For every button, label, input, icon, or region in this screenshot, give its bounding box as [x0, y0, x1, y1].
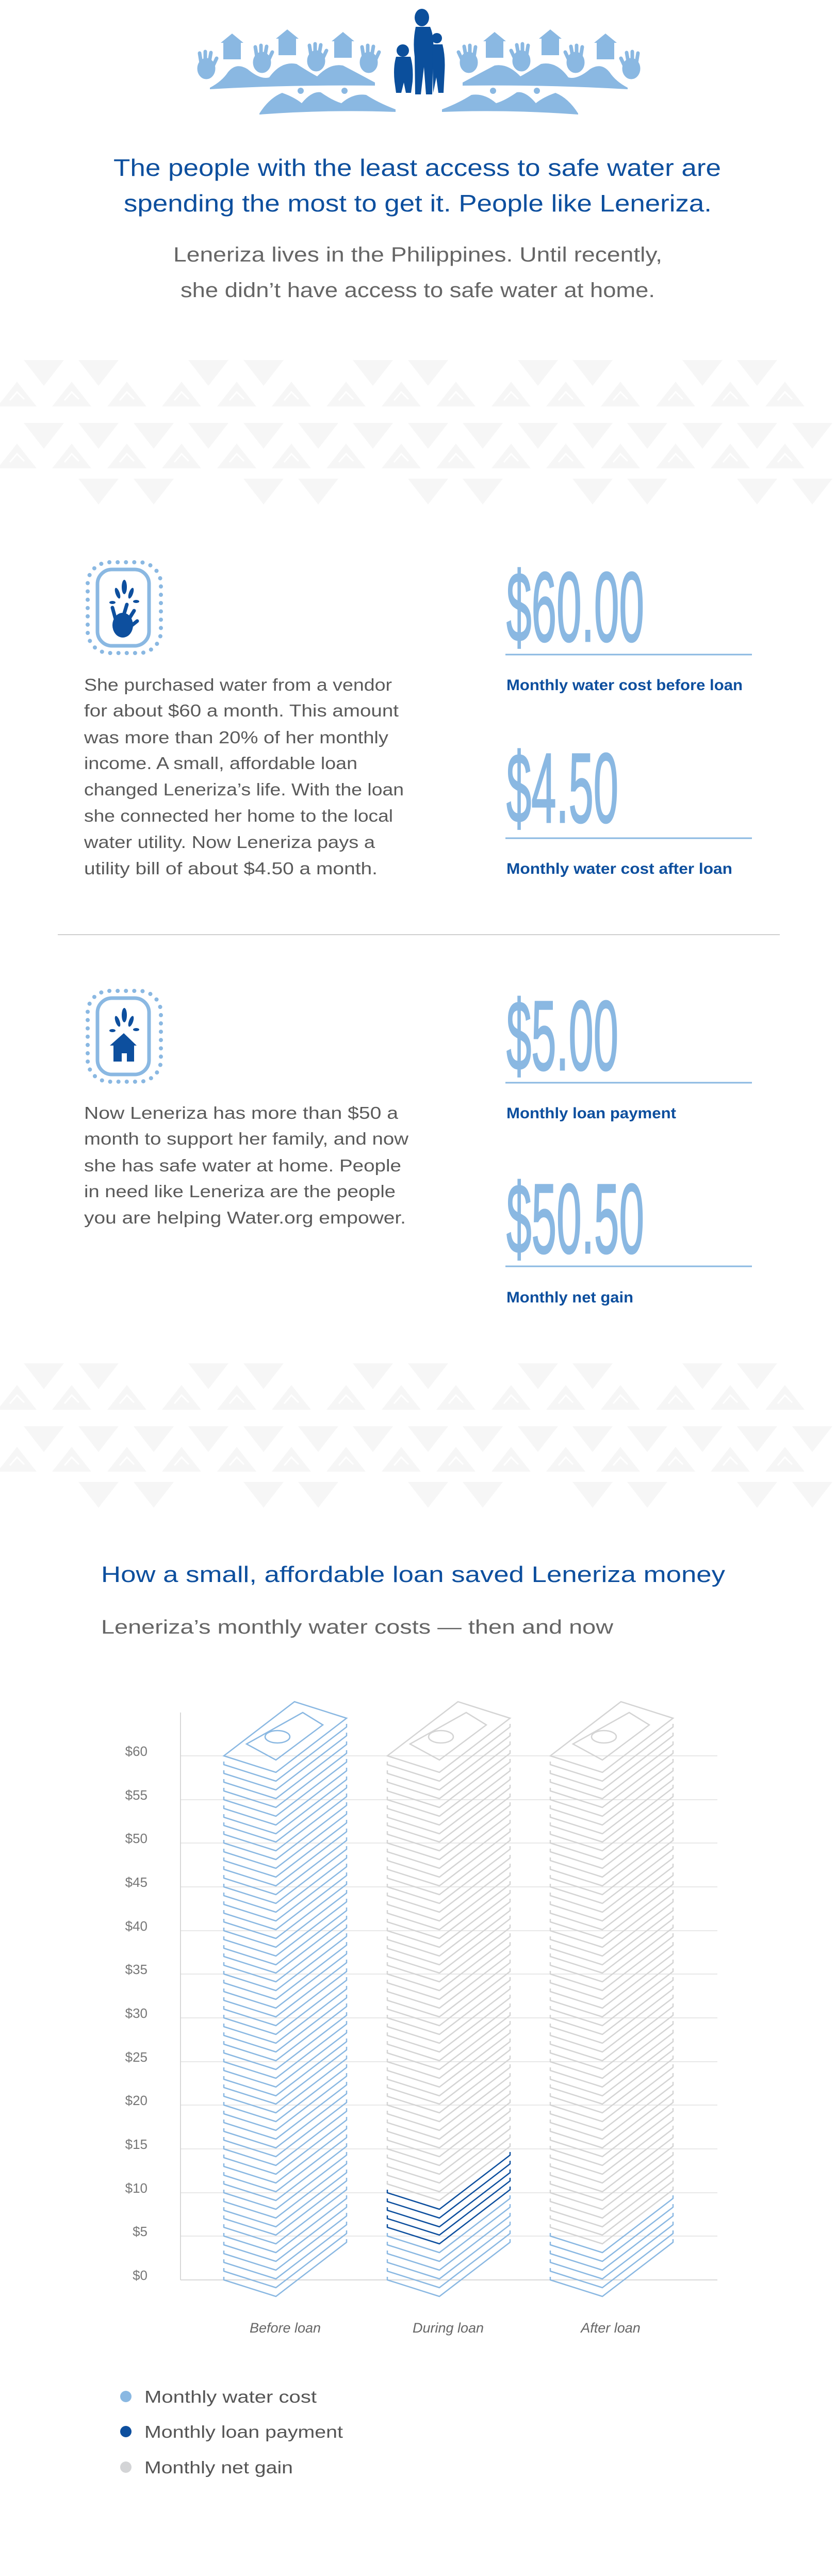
bar: before loan — [224, 1702, 347, 2296]
panel: loan payment and net gain — [84, 980, 752, 1306]
y axis labels: $35 — [125, 1962, 147, 1977]
y axis labels: $25 — [125, 2049, 147, 2065]
bar: after loan — [550, 1702, 673, 2296]
y axis labels: $50 — [125, 1831, 147, 1846]
text block: story part 2: she has safe water at home. People — [84, 1156, 401, 1175]
x axis category labels: After loan — [580, 2320, 641, 2336]
intro text — [173, 243, 662, 302]
stat: $4.50: $4.50 — [506, 732, 618, 843]
stat: $5.00: Monthly loan payment — [506, 1105, 676, 1122]
text block: story part 1: She purchased water from a vendor — [84, 675, 392, 694]
x axis category labels: During loan — [413, 2320, 484, 2336]
bar: during loan — [387, 1702, 510, 2296]
x axis category labels: Before loan — [250, 2320, 321, 2336]
text block: story part 1: for about $60 a month. This amount — [84, 701, 399, 720]
y axis labels: $15 — [125, 2137, 147, 2152]
stat: $60.00 — [505, 551, 752, 694]
text block: story part 1: utility bill of about $4.50 a month. — [84, 859, 378, 878]
stat: $4.50: Monthly water cost after loan — [506, 860, 732, 877]
text block: story part 2: you are helping Water.org empower. — [84, 1208, 406, 1227]
chart subtitle: Leneriza’s monthly water costs — then and now — [101, 1617, 614, 1638]
y axis labels: $45 — [125, 1874, 147, 1890]
decorative triangle band top — [0, 360, 832, 504]
legend — [120, 2387, 343, 2477]
intro text: she didn’t have access to safe water at home. — [181, 279, 655, 302]
text block: story part 2 — [84, 1103, 408, 1227]
stat: $50.50 — [505, 1163, 752, 1306]
legend: Monthly net gain — [144, 2458, 293, 2477]
y axis labels: $30 — [125, 2006, 147, 2021]
y axis labels: $55 — [125, 1787, 147, 1803]
title: spending the most to get it. People like Leneriza. — [124, 190, 712, 217]
text block: story part 2: month to support her family, and now — [84, 1129, 408, 1148]
text block: story part 1: water utility. Now Leneriza pays a — [84, 833, 375, 852]
text block: story part 1 — [84, 675, 404, 878]
text block: story part 1: income. A small, affordable loan — [84, 754, 357, 773]
header illustration — [199, 9, 638, 115]
y axis labels: $60 — [125, 1743, 147, 1759]
y axis labels: $40 — [125, 1918, 147, 1934]
stat: $50.50: Monthly net gain — [506, 1289, 633, 1306]
text block: story part 2: in need like Leneriza are the people — [84, 1182, 396, 1201]
y axis labels — [125, 1743, 147, 2283]
text block: story part 1: changed Leneriza’s life. With the loan — [84, 780, 404, 799]
y axis labels: $20 — [125, 2093, 147, 2108]
y axis and gridlines — [181, 1713, 717, 2280]
panel: before/after water cost — [84, 551, 752, 878]
decorative triangle band bottom — [0, 1363, 832, 1508]
stat: $60.00: Monthly water cost before loan — [506, 677, 743, 694]
legend: Monthly loan payment — [144, 2422, 343, 2441]
text block: story part 1: was more than 20% of her monthly — [84, 728, 389, 747]
stat: $60.00: $60.00 — [506, 551, 644, 662]
title — [113, 154, 721, 217]
chart title: How a small, affordable loan saved Leneriza money — [101, 1562, 725, 1587]
icon: family silhouette — [394, 9, 445, 94]
y axis labels: $5 — [133, 2224, 147, 2239]
title: The people with the least access to safe water are — [113, 154, 721, 181]
y axis labels: $0 — [133, 2268, 147, 2283]
stacked bill chart — [125, 1702, 717, 2336]
x axis category labels — [250, 2320, 641, 2336]
stat: $50.50: $50.50 — [506, 1163, 644, 1274]
intro text: Leneriza lives in the Philippines. Until recently, — [173, 243, 662, 266]
y axis labels: $10 — [125, 2180, 147, 2196]
icon: house with water splash — [88, 991, 161, 1082]
text block: story part 2: Now Leneriza has more than $50 a — [84, 1103, 399, 1122]
stat: $5.00: $5.00 — [506, 980, 618, 1091]
legend: Monthly water cost — [144, 2387, 317, 2406]
icon: hand with water splash — [88, 562, 161, 653]
text block: story part 1: she connected her home to the local — [84, 806, 393, 825]
